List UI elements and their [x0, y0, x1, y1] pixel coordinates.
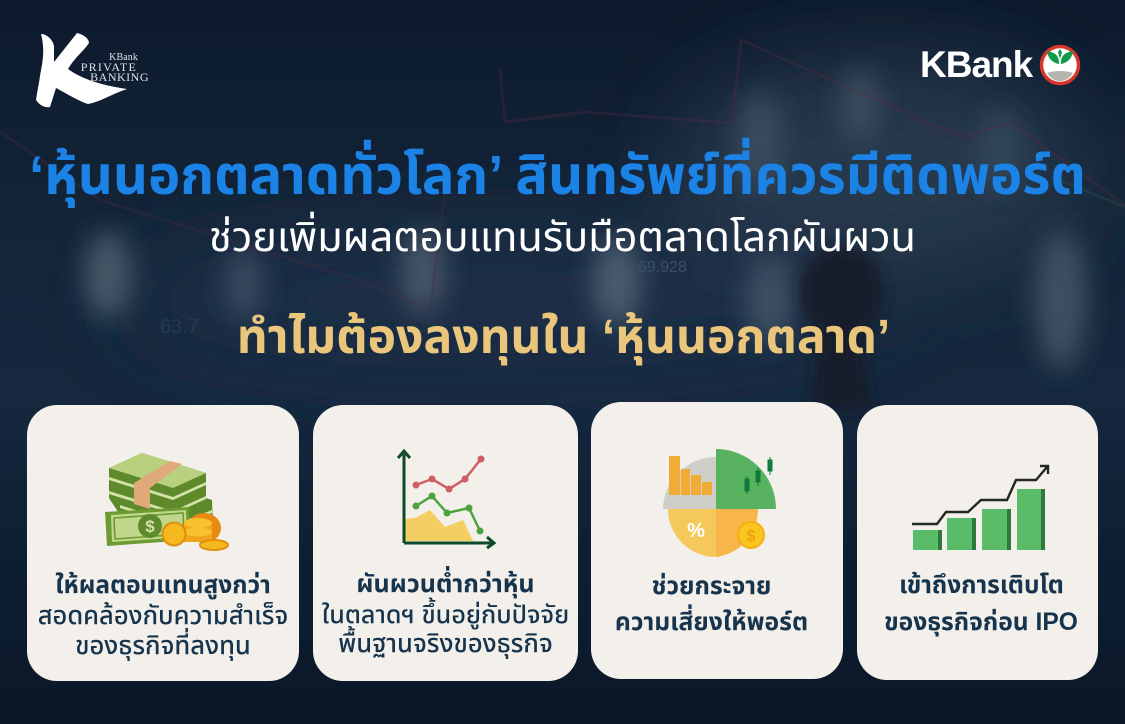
logo text: BANKING: [90, 70, 149, 84]
dark knob piece: [800, 246, 884, 410]
icon: segmented pie: $: [747, 528, 756, 545]
icon: line chart: [396, 448, 496, 550]
icon: money stack and coins: [105, 453, 229, 551]
logo text: [81, 52, 149, 84]
panel: diversification: ความเสี่ยงให้พอร์ต: [615, 609, 808, 636]
wordmark: KBank: [920, 44, 1032, 85]
title: ‘หุ้นนอกตลาดทั่วโลก’ สินทรัพย์ที่ควรมีติดพอร์ต: [29, 145, 1086, 206]
subtitle: ช่วยเพิ่มผลตอบแทนรับมือตลาดโลกผันผวน: [209, 213, 916, 260]
panel: lower volatility: [313, 405, 578, 681]
icon: segmented pie: [663, 449, 776, 557]
panel: higher returns: ของธุรกิจที่ลงทุน: [75, 632, 251, 660]
icon: growth bars: [912, 464, 1050, 550]
panel: lower volatility: ในตลาดฯ ขึ้นอยู่กับปัจจัย: [322, 601, 569, 629]
card text: เข้าถึงการเติบโต: [899, 572, 1064, 599]
background: blurred market scene: 63.7: [160, 316, 199, 338]
logo text: PRIVATE: [81, 60, 137, 74]
card text: ให้ผลตอบแทนสูงกว่า: [55, 572, 271, 599]
icon: segmented pie: %: [687, 520, 705, 542]
icon: money stack and coins: $: [145, 517, 155, 536]
panel: pre-IPO growth: [857, 405, 1098, 680]
logo: KBank: [920, 44, 1080, 86]
logo: KBank Private Banking: [36, 33, 149, 108]
panel: pre-IPO growth: ของธุรกิจก่อน IPO: [884, 609, 1078, 636]
panel: higher returns: สอดคล้องกับความสำเร็จ: [38, 602, 288, 630]
panel: lower volatility: พื้นฐานจริงของธุรกิจ: [338, 630, 553, 658]
card text: ช่วยกระจาย: [652, 573, 771, 600]
section heading: ทำไมต้องลงทุนใน ‘หุ้นนอกตลาด’: [237, 311, 890, 364]
logo text: KBank: [109, 52, 138, 63]
background: blurred market scene: 69.928: [638, 259, 687, 276]
panel: higher returns: [27, 405, 299, 681]
icon: KBank emblem: [1040, 44, 1080, 86]
card text: ผันผวนต่ำกว่าหุ้น: [356, 570, 535, 598]
panel: diversification: [591, 402, 843, 679]
icon: brush K: [36, 33, 127, 108]
